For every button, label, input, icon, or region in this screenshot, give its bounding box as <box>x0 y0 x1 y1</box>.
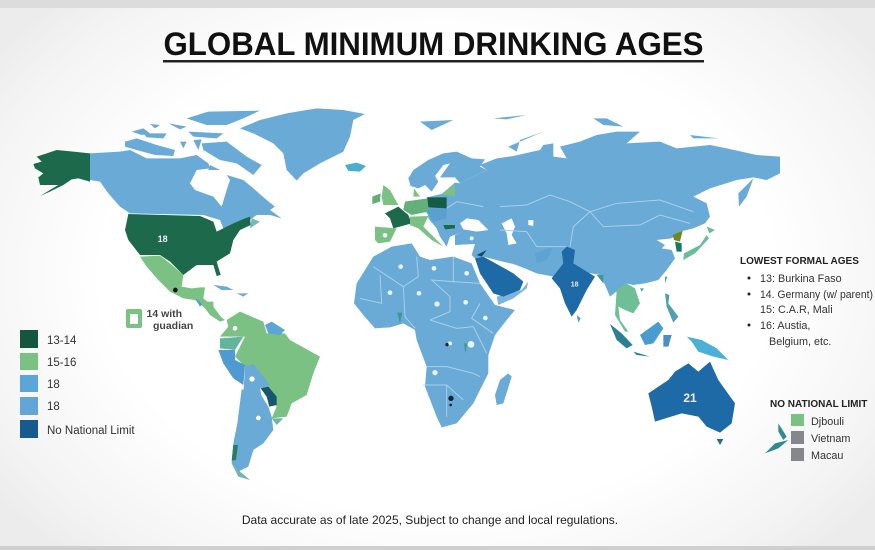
callout: 14 with guardian: guadian <box>153 320 193 332</box>
country dots <box>383 233 474 240</box>
Spain <box>375 227 397 243</box>
Aral Sea <box>528 220 533 226</box>
Uruguay <box>272 418 283 425</box>
panel: no national limit: NO NATIONAL LIMIT <box>770 399 867 410</box>
map: North America <box>33 108 366 320</box>
Philippines <box>665 293 678 323</box>
panel: lowest formal ages: LOWEST FORMAL AGES <box>740 256 859 267</box>
Australia <box>648 362 735 433</box>
Svalbard and Arctic Russia <box>420 115 753 207</box>
Tierra del Fuego <box>232 463 250 480</box>
map: Eurasia <box>372 115 780 297</box>
panel: no national limit: Vietnam <box>811 433 850 445</box>
Alaska <box>33 150 90 196</box>
New Zealand <box>765 423 788 453</box>
title: GLOBAL MINIMUM DRINKING AGES <box>164 26 704 62</box>
Levant mark <box>477 250 487 257</box>
Mexico <box>140 256 223 320</box>
panel: no national limit: Djbouli <box>811 416 844 428</box>
footnote: Data accurate as of late 2025, Subject to change and local regulations. <box>242 513 618 527</box>
marker: Mexico <box>173 288 178 292</box>
Ecuador <box>220 337 243 350</box>
Korea <box>673 231 683 242</box>
panel: lowest formal ages <box>740 256 873 348</box>
panel: no national limit: Macau <box>811 450 843 462</box>
markers: Southern Africa <box>445 343 454 406</box>
Denmark <box>413 188 420 197</box>
Caribbean <box>213 285 248 297</box>
Iran region <box>535 247 553 263</box>
Russia and Asia <box>427 132 780 297</box>
Paraguay <box>261 387 277 407</box>
Guianas <box>265 322 285 335</box>
Baltics <box>442 184 455 197</box>
Germany and Benelux <box>403 198 428 215</box>
Greenland <box>240 108 365 181</box>
New Guinea <box>687 337 728 360</box>
legend: 13-14 <box>47 335 77 347</box>
panel: lowest formal ages: Belgium, etc. <box>769 336 831 348</box>
Saudi Arabia <box>475 257 523 297</box>
Japan <box>683 227 715 260</box>
Scandinavia <box>408 152 487 192</box>
world map <box>33 108 788 480</box>
Borneo <box>640 322 663 345</box>
African borders <box>360 257 493 417</box>
legend: 18 <box>47 401 60 413</box>
panel: lowest formal ages: 14. Germany (w/ parent) <box>760 289 873 301</box>
panel: lowest formal ages: 13: Burkina Faso <box>760 273 842 285</box>
Bolivia <box>243 364 270 397</box>
legend <box>20 330 135 438</box>
Tasmania <box>717 439 723 445</box>
Africa dots <box>388 264 488 375</box>
legend: No National Limit <box>47 425 135 437</box>
panel: lowest formal ages: 15: C.A.R, Mali <box>760 304 833 316</box>
Asian borders <box>447 195 693 247</box>
Togo and Malawi strips <box>397 313 467 353</box>
Brazil and north <box>220 312 320 418</box>
Ireland <box>372 193 381 204</box>
map: Oceania <box>648 362 788 453</box>
Peru <box>218 350 245 385</box>
Central America <box>195 298 203 307</box>
Java <box>633 352 650 357</box>
callout: 14 with guardian <box>126 308 193 332</box>
Iceland <box>345 163 366 172</box>
Caspian Sea <box>502 218 517 245</box>
Poland <box>427 197 447 208</box>
United States <box>125 214 251 276</box>
Italy and Alps <box>410 216 443 247</box>
Oman and Yemen <box>497 282 528 305</box>
Bangladesh <box>597 275 603 283</box>
callout: 14 with guardian: 14 with <box>146 308 182 320</box>
Panama <box>200 302 225 322</box>
India <box>552 247 595 317</box>
UK <box>382 185 398 205</box>
label: Australia 21: 21 <box>683 391 697 405</box>
Taiwan and Hainan <box>640 277 667 292</box>
map: South America <box>200 302 320 480</box>
Africa <box>354 243 515 427</box>
Central Europe <box>423 208 447 222</box>
label: India 18: 18 <box>571 282 579 289</box>
map: South and Southeast Asia <box>552 227 728 360</box>
Black Sea <box>460 218 488 232</box>
map: Africa and Arabia <box>354 243 528 427</box>
map: Canada <box>90 111 282 228</box>
panel: lowest formal ages: 16: Austia, <box>760 320 810 332</box>
Sri Lanka <box>577 315 581 323</box>
label: USA 18: 18 <box>158 234 168 244</box>
legend: 15-16 <box>47 357 76 369</box>
Southern Chile <box>232 445 238 461</box>
France <box>385 207 412 228</box>
legend: 18 <box>47 379 60 391</box>
Madagascar <box>495 373 512 405</box>
Maritimes <box>250 218 260 228</box>
Thailand and Malaya <box>615 283 640 332</box>
Bulgaria <box>443 225 455 229</box>
Sumatra <box>610 324 633 348</box>
Argentina and Chile <box>232 389 273 472</box>
Arctic islands <box>125 111 262 175</box>
Sulawesi <box>663 335 672 347</box>
panel: no national limit <box>770 399 867 462</box>
